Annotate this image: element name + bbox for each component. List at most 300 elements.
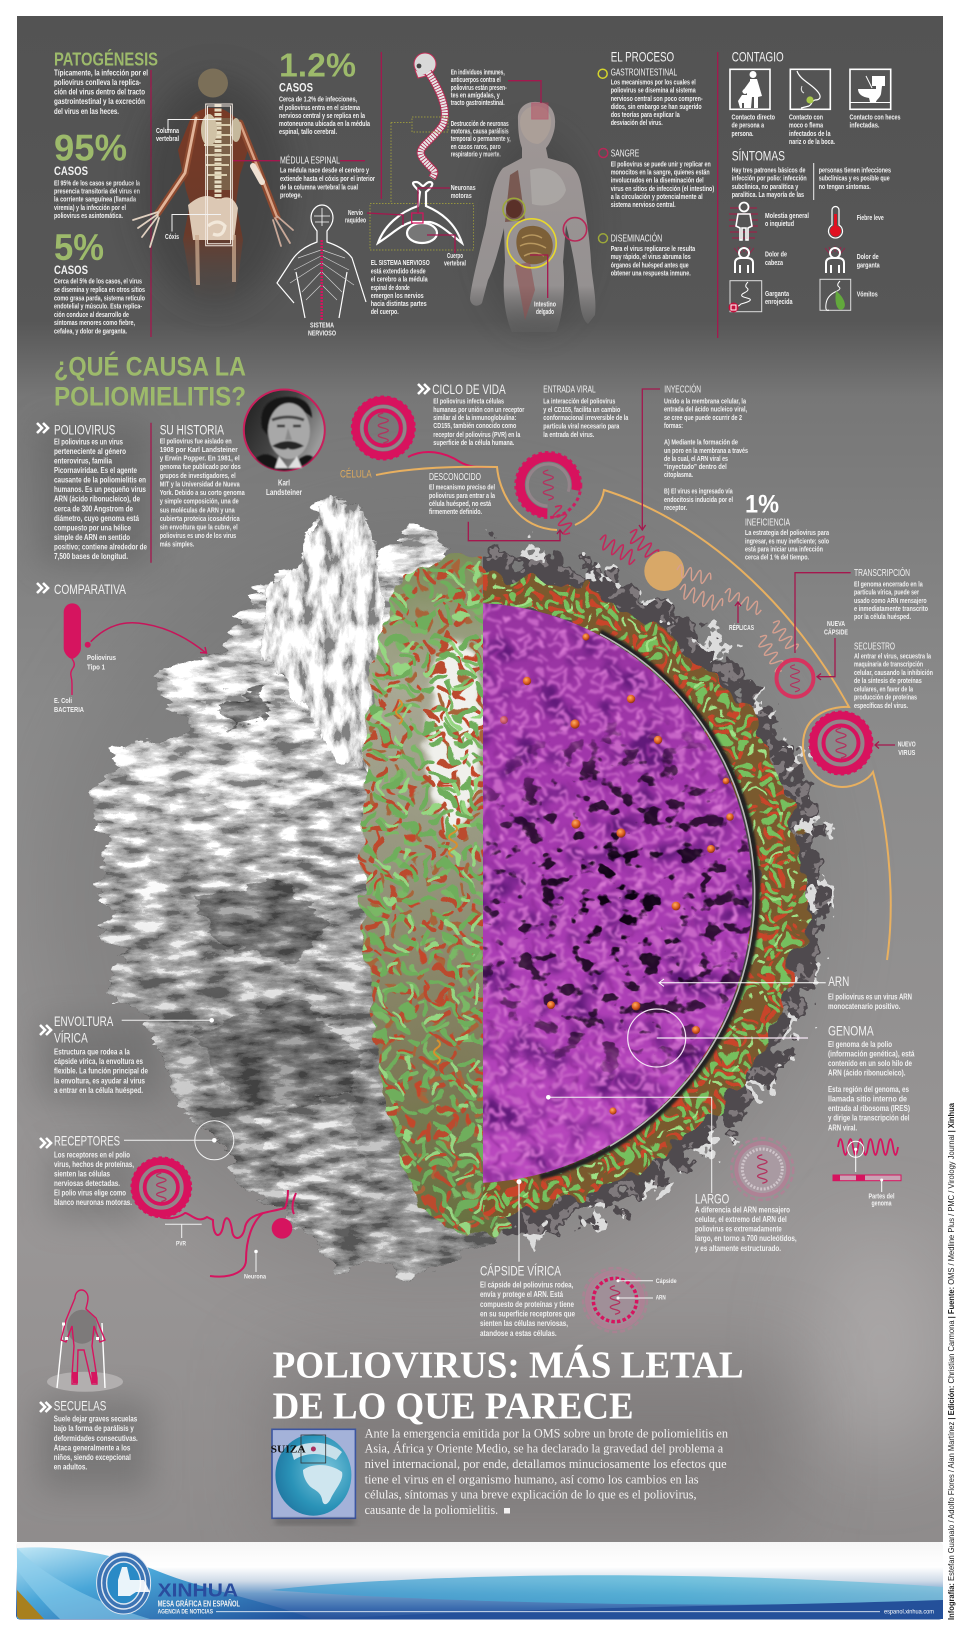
label: karl landsteiner: Landsteiner — [266, 488, 302, 497]
chevrons — [37, 583, 48, 593]
text: entrada viral: y el CD155, facilita un cambio — [543, 407, 620, 414]
text: largo: largo, en torno a 700 nucleótidos, — [695, 1234, 797, 1243]
text: su historia: y simple composición, una de — [160, 499, 239, 506]
text: su historia: 1908 por Karl Landsteiner — [160, 447, 238, 454]
text: entrada viral: La interacción del poliovirus — [543, 399, 615, 406]
label: neuronas motoras: motoras — [451, 193, 472, 200]
portrait: Karl Landsteiner — [244, 390, 325, 497]
logo text: XINHUA — [158, 1581, 238, 1601]
label: poliovirus tipo 1: Poliovirus — [87, 655, 116, 662]
arrow: desconocido — [468, 522, 563, 541]
text: inyección: un poro en la membrana a través — [664, 448, 748, 455]
text: secuestro: Al entrar el virus, secuestra la — [854, 654, 931, 661]
text: secuelas: bajo la forma de parálisis y — [54, 1424, 134, 1433]
spine and ribs — [205, 118, 232, 190]
text: ineficiencia: está para iniciar una infección — [745, 547, 823, 554]
text: secuestro: de la síntesis de proteínas — [854, 678, 922, 685]
text: secuestro: maquinaria de transcripción — [854, 662, 923, 669]
label: vómitos: Vómitos — [857, 292, 878, 299]
heading: envoltura vírica: VÍRICA — [54, 1029, 88, 1045]
text síntomas right: personas tienen infecciones — [819, 168, 891, 174]
icon: pale virus — [731, 1138, 793, 1200]
arms — [133, 118, 293, 247]
text: genoma: entrada al ribosoma (IRES) — [828, 1104, 910, 1113]
website: espanol.xinhua.com — [884, 1610, 934, 1616]
panel: envoltura vírica — [40, 1013, 214, 1095]
capsid ring, right side — [483, 570, 812, 1218]
text diseminación: obtener una respuesta inmune. — [611, 270, 691, 278]
label: dolor de cabeza — [765, 252, 787, 267]
label: contact 2: infectados de la — [789, 131, 831, 138]
text: entrada viral — [543, 399, 628, 439]
highlight circles — [503, 198, 587, 268]
text: introduction: causante de la poliomielitis. — [365, 1502, 498, 1517]
text 95% — [54, 180, 140, 220]
text: poliovirus: perteneciente al género — [54, 447, 126, 456]
text: su historia: grupos de investigadores, el — [160, 473, 236, 480]
text: genoma — [828, 1040, 915, 1132]
text: cápside: envía y protege el ARN. Está — [480, 1290, 563, 1299]
text: destrucción de neuronas: motoras, causa parálisis — [451, 128, 509, 136]
heading: secuelas: SECUELAS — [54, 1398, 106, 1414]
label: partes del genoma: Partes del — [868, 1193, 895, 1200]
heading: genoma: GENOMA — [828, 1022, 874, 1038]
label: karl landsteiner — [266, 478, 302, 497]
arrow: inyección — [639, 389, 660, 530]
text: envoltura: cápside vírica, la envoltura es — [54, 1057, 143, 1066]
icon: capsid diagram — [583, 1268, 647, 1332]
pointer: largo — [546, 1095, 712, 1193]
text síntomas left: infección por polio: infección — [732, 176, 807, 183]
title: POLIOVIRUS: MÁS LETAL — [273, 1345, 744, 1387]
text: el sistema nervioso: está extendido desde — [371, 268, 426, 276]
text: entrada viral: conformacional irreversible de la — [543, 415, 628, 422]
text: inyección: “inyectado” dentro del — [664, 464, 727, 471]
text: receptores: El polio virus elige como — [54, 1189, 126, 1198]
text: secuestro: celulares, en favor de la — [854, 686, 913, 693]
text: poliovirus: simple de ARN en sentido — [54, 533, 130, 542]
label: cápside: Cápside — [656, 1278, 677, 1285]
label: réplicas: RÉPLICAS — [729, 623, 754, 632]
text diseminación — [611, 246, 695, 278]
text: secuelas: deformidades consecutivas. — [54, 1434, 138, 1443]
label: garganta enrojecida — [765, 291, 793, 306]
label: intestino delgado: Intestino — [534, 302, 556, 309]
text gastrointestinal — [611, 80, 703, 127]
text: transcripción: El genoma encerrado en la — [854, 582, 923, 589]
text: su historia: y Erwin Popper. En 1981, el — [160, 456, 240, 462]
text: introduction: Ante la emergencia emitida por la OMS sobre un brote de poliomielitis en — [365, 1425, 728, 1440]
label: contact 3 — [850, 114, 901, 130]
panel: patogénesis — [54, 49, 158, 335]
pelvis — [188, 196, 238, 240]
text 1.2%: el poliovirus entra en el sistema — [279, 105, 360, 112]
text 5%: ción conduce al desarrollo de — [54, 312, 129, 319]
icon: vomit — [820, 279, 851, 310]
text: ciclo de vida — [433, 398, 525, 447]
text síntomas left — [732, 168, 807, 199]
chevrons — [37, 423, 48, 433]
heading: receptores: RECEPTORES — [54, 1133, 120, 1149]
text: desconocido: El mecanismo preciso del — [429, 485, 495, 492]
heading: cápside vírica: CÁPSIDE VÍRICA — [480, 1263, 561, 1279]
label: contact 1: de persona a — [732, 123, 764, 130]
casos label 5: CASOS — [54, 263, 88, 277]
intro text: Típicamente, la infección por el — [54, 68, 148, 78]
envelope highlights, upper peaks — [260, 500, 392, 780]
text: inyección: B) El virus es ingresado vía — [664, 489, 733, 496]
text: arn: El poliovirus es un virus ARN — [828, 992, 912, 1001]
squiggle: entering RNA — [550, 504, 575, 536]
label: intestino delgado: delgado — [536, 309, 554, 316]
label: contact 2 — [789, 114, 835, 146]
text: genoma: ARN (ácido ribonucleico). — [828, 1069, 906, 1078]
text: envoltura: flexible. La función principal de — [54, 1067, 148, 1076]
text: ciclo de vida: CD155, también conocido como — [433, 423, 516, 430]
text: genoma: llamada sitio interno de — [828, 1095, 907, 1104]
label: cuerpo vertebral — [444, 253, 466, 268]
callout: ARN — [659, 973, 912, 1011]
text: transcripción: usado como ARN mensajero — [854, 598, 927, 605]
text: receptores — [54, 1150, 134, 1207]
text 5%: endotelial y músculo. Esta replica- — [54, 304, 143, 311]
title — [273, 1345, 744, 1427]
text diseminación: muy rápido, el virus abruma los — [611, 254, 691, 261]
text: inyección: citoplasma. — [664, 472, 693, 479]
text: envoltura: la envoltura, es ayudar al virus — [54, 1076, 145, 1085]
heading: patogénesis: PATOGÉNESIS — [54, 49, 158, 70]
heading: poliovirus: POLIOVIRUS — [54, 421, 115, 437]
icon: attached virus — [352, 397, 414, 459]
text: secuelas: en adultos. — [54, 1463, 87, 1472]
logo text: MESA GRÁFICA EN ESPAÑOL — [158, 1600, 240, 1609]
text: ineficiencia: La estrategia del poliovirus para — [745, 530, 829, 537]
text: envoltura: Estructura que rodea a la — [54, 1048, 130, 1057]
heading: médula espinal: MÉDULA ESPINAL — [280, 154, 340, 166]
label: neurona — [244, 1250, 267, 1281]
text sangre — [611, 162, 714, 209]
marker: diseminación — [598, 234, 608, 243]
heading: contagio: CONTAGIO — [732, 49, 784, 65]
icon: thermometer — [828, 207, 843, 238]
text médula: La médula nace desde el cerebro y — [280, 168, 369, 175]
text: genoma: El genoma de la polio — [828, 1040, 892, 1049]
label: neuronas motoras — [451, 185, 476, 200]
casos label 1.2: CASOS — [279, 81, 313, 95]
heading: ineficiencia: INEFICIENCIA — [745, 517, 790, 528]
intro text: gastrointestinal y la excreción — [54, 97, 145, 106]
icon: poliovirus dot — [85, 642, 91, 648]
icon: headache — [734, 246, 754, 273]
label: dolor de cabeza: Dolor de — [765, 252, 787, 259]
text: cápside: atandose a estas células. — [480, 1329, 557, 1338]
capsid band: cut surface with rods — [361, 556, 510, 1234]
text: secuestro: celular, causando la inhibición — [854, 670, 933, 677]
text: largo: y es altamente estructurado. — [695, 1244, 781, 1253]
heading: arn: ARN — [828, 973, 849, 989]
text síntomas left: Hay tres patrones básicos de — [732, 168, 805, 174]
figure: human back anatomy — [133, 68, 365, 305]
text: inyección: Unido a la membrana celular, la — [664, 398, 746, 405]
label: nervio raquídeo — [345, 210, 366, 225]
stat: 1.2%: 1.2% — [279, 47, 356, 84]
arrow: comparison — [91, 623, 206, 653]
map: globe with Suiza — [271, 1429, 355, 1524]
label: cuerpo vertebral: vertebral — [444, 261, 466, 268]
chevrons — [40, 1402, 50, 1412]
text: inyección: de la cual, el ARN viral es — [664, 456, 728, 463]
text 1.2%: motoneurona ubicada en la médula — [279, 121, 370, 128]
text: envoltura: a entrar en la célula huésped. — [54, 1086, 143, 1095]
text: su historia: El poliovirus fue aislado en — [160, 438, 232, 445]
text diseminación: Para el virus replicarse le resulta — [611, 246, 695, 253]
intro text: ción del virus dentro del tracto — [54, 88, 145, 96]
icon: person contact — [730, 69, 770, 109]
text: ciclo de vida: humanas por unión con un receptor — [433, 407, 525, 414]
label: dolor de garganta: garganta — [857, 262, 880, 269]
icon: entering virus — [516, 452, 581, 518]
label: partes del genoma — [868, 1193, 895, 1208]
text: entrada viral: la entrada del virus. — [543, 432, 594, 439]
text: el sistema nervioso: hacia distintas partes — [371, 301, 427, 308]
text: individuos inmunes: En individuos inmunes, — [451, 70, 505, 76]
label: dolor de garganta: Dolor de — [857, 254, 879, 261]
text: largo: A diferencia del ARN mensajero — [695, 1205, 790, 1214]
label: contact 3: Contacto con heces — [850, 114, 901, 121]
text: genoma: contenido en un solo hilo de — [828, 1059, 912, 1068]
text: su historia: sin envoltura que la cubre, el — [160, 524, 238, 532]
illustration: poliovirus cross-section — [91, 500, 824, 1278]
icon: toilet — [850, 69, 891, 109]
text: destrucción de neuronas: Destrucción de neuronas — [451, 121, 509, 128]
text gastrointestinal: didos, sin embargo se han sugerido — [611, 104, 702, 111]
label: nuevo virus — [898, 742, 916, 757]
text: introduction — [365, 1425, 728, 1517]
text 95%: la corriente sanguínea (llamada — [54, 197, 136, 204]
label: columna vertebral: vertebral — [156, 136, 179, 143]
text: su historia: poliovirus es uno de los virus — [160, 533, 236, 540]
text: el sistema nervioso: el cerebro a la médula — [371, 276, 428, 284]
text gastrointestinal: nervioso central son poco compren- — [611, 96, 703, 103]
logo text: AGENCIA DE NOTICIAS — [158, 1610, 213, 1616]
text: su historia: cubierta proteica icosaédrica — [160, 516, 240, 523]
spine — [421, 72, 445, 178]
text: receptores: virus, hechos de proteínas, — [54, 1160, 134, 1169]
icon: virus on receptor — [132, 1158, 191, 1217]
text 1.2% — [279, 96, 370, 136]
callout: cápside vírica — [480, 1179, 677, 1338]
cell membrane line — [376, 467, 891, 960]
panel: secuelas — [40, 1290, 138, 1472]
text: arn: monocatenario positivo. — [828, 1002, 900, 1011]
pointers: capsid labels — [616, 1279, 653, 1300]
text: genoma: Esta región del genoma, es — [828, 1085, 909, 1094]
icon: new virus — [810, 712, 872, 774]
text 5%: síntomas menores como fiebre, — [54, 320, 135, 327]
text: poliovirus: humanos. Es un pequeño virus — [54, 485, 146, 494]
text: secuelas: Suele dejar graves secuelas — [54, 1415, 138, 1424]
arrow: nueva cápside — [817, 638, 835, 680]
pointer: genoma — [628, 1009, 808, 1067]
pointer: cápside — [516, 1179, 522, 1262]
subheading: diseminación: DISEMINACIÓN — [611, 232, 662, 245]
text 1.2%: nervioso central y se replica en la — [279, 113, 365, 120]
text: secuestro — [854, 654, 933, 710]
text: poliovirus: enterovirus, familia — [54, 456, 112, 465]
line: transcripción — [795, 573, 851, 653]
icon: e. coli bacteria — [64, 603, 81, 695]
RNA core: purple hemisphere — [483, 603, 752, 1183]
text: inyección: endocitosis inducida por el — [664, 497, 733, 504]
text: inyección: formas: — [664, 423, 683, 430]
logo: xinhua — [97, 1552, 151, 1614]
text síntomas left: paralítica. La mayoría de las — [732, 192, 804, 199]
label: fiebre: Fiebre leve — [857, 215, 884, 222]
label: poliovirus tipo 1: Tipo 1 — [87, 665, 105, 672]
icon: nose and mouth — [790, 69, 830, 109]
text: desconocido: célula huésped, no está — [429, 501, 491, 508]
text médula: de la columna vertebral la cual — [280, 184, 358, 192]
heading: comparativa: COMPARATIVA — [54, 581, 126, 597]
footer banner — [16, 1542, 943, 1620]
text: poliovirus: compuesto por una hélice — [54, 523, 131, 532]
text: su historia: sus moléculas de ARN y una — [160, 507, 235, 514]
text sangre: involucrados en la diseminación del — [611, 178, 704, 184]
text: desconocido: poliovirus para entrar a la — [429, 493, 495, 500]
text: receptores: Los receptores en el polio — [54, 1150, 130, 1159]
label: PVR: PVR — [176, 1242, 187, 1248]
marker: gastrointestinal — [598, 69, 607, 78]
panel: 1.2% casos — [279, 47, 375, 200]
text: individuos inmunes: poliovirus están presen- — [451, 85, 507, 92]
text 1.2%: Cerca de 1.2% de infecciones, — [279, 96, 357, 104]
panel: contagio — [730, 49, 901, 146]
label: columna vertebral — [156, 128, 179, 143]
text: el sistema nervioso: del cuerpo. — [371, 309, 399, 316]
diagram: ciclo de vida — [340, 381, 933, 960]
text: poliovirus: El poliovirus es un virus — [54, 437, 123, 446]
text: el sistema nervioso: espinal de donde — [371, 285, 410, 292]
text: ciclo de vida: superficie de la célula humana. — [433, 440, 514, 447]
neuron — [160, 1190, 296, 1277]
text: su historia: genoma fue publicado por dos — [160, 464, 241, 471]
text médula: protege. — [280, 192, 302, 200]
subheading: gastrointestinal: GASTROINTESTINAL — [611, 67, 677, 78]
text: inyección: entrada del ácido nucleico viral, — [664, 407, 747, 414]
heading: envoltura vírica: ENVOLTURA — [54, 1013, 114, 1029]
text: poliovirus: diámetro, cuyo genoma está — [54, 514, 139, 523]
chevrons — [40, 1138, 51, 1148]
label: molestia: Molestia general — [765, 213, 809, 220]
text: secuelas — [54, 1415, 138, 1472]
label: nervio raquídeo: Nervio — [348, 210, 363, 217]
text: genoma: ARN viral. — [828, 1123, 857, 1132]
text: transcripción: por la célula huésped. — [854, 614, 911, 621]
text: secuestro: específicas del virus. — [854, 703, 908, 710]
text síntomas right: no tengan síntomas. — [819, 184, 871, 191]
label: dolor de cabeza: cabeza — [765, 260, 783, 267]
label: columna vertebral: Columna — [156, 128, 179, 135]
text: cápside: sienten las células nerviosas, — [480, 1319, 568, 1328]
text: cápside: El cápside del poliovirus rodea, — [480, 1281, 573, 1290]
virus envelope: grey rocky left half — [91, 500, 500, 1278]
label: neuronas motoras: Neuronas — [451, 185, 476, 192]
text gastrointestinal: dos teorías para explicar la — [611, 112, 680, 119]
text 5%: como grasa parda, sistema retículo — [54, 295, 145, 302]
panel: síntomas — [728, 148, 891, 312]
label: sistema nervioso: SISTEMA — [310, 322, 334, 330]
label: contact 3: infectadas. — [850, 123, 880, 130]
label: nueva cápside — [824, 621, 848, 636]
text: introduction: nivel internacional, por ende, detallamos minuciosamente los efectos que — [365, 1456, 727, 1471]
label: contact 1: Contacto directo — [732, 114, 775, 121]
chevrons — [418, 384, 429, 394]
heading: el proceso: EL PROCESO — [611, 49, 674, 65]
heading: qué causa la poliomielitis: POLIOMIELITIS? — [54, 382, 246, 412]
stat: 5%: 5% — [54, 227, 104, 268]
figure: skeleton spine and vertebra — [345, 53, 511, 316]
map: globe with Suiza: SUIZA — [271, 1444, 306, 1456]
panel: receptores — [40, 1121, 296, 1281]
intro text — [54, 68, 148, 116]
text: ciclo de vida: similar al de la inmunoglobulina: — [433, 415, 516, 422]
heading: inyección: INYECCIÓN — [664, 382, 701, 395]
text: genoma: (información genética), está — [828, 1050, 915, 1059]
text: poliovirus: causante de la poliomielitis en — [54, 476, 146, 485]
title: DE LO QUE PARECE — [273, 1385, 634, 1427]
text: poliovirus: cerca de 300 Angstrom de — [54, 504, 133, 513]
text 5%: cefalea, y dolor de garganta. — [54, 328, 127, 335]
vertebra — [378, 182, 462, 243]
label: nuevo virus: NUEVO — [898, 742, 916, 749]
text: largo: celular, el extremo del ARN del — [695, 1215, 787, 1224]
icon: child with crutches — [47, 1290, 123, 1392]
text: entrada viral: partícula viral necesario para — [543, 424, 619, 430]
text: individuos inmunes — [451, 70, 507, 107]
text: transcripción — [854, 582, 928, 621]
text: individuos inmunes: tes en amígdalas, y — [451, 92, 500, 100]
heading: transcripción: TRANSCRIPCIÓN — [854, 566, 910, 579]
text: destrucción de neuronas: temporal o permanente y, — [451, 136, 511, 143]
panel: su historia — [160, 421, 245, 549]
text: largo — [695, 1205, 797, 1253]
text gastrointestinal: poliovirus se disemina al sistema — [611, 88, 696, 95]
text 95%: El 95% de los casos se produce la — [54, 180, 140, 187]
heading: qué causa la poliomielitis — [54, 352, 246, 412]
text: el sistema nervioso: emergen los nervios — [371, 293, 424, 300]
text: inyección: se cree que puede ocurrir de 2 — [664, 415, 742, 422]
text: su historia: York. Debido a su corto genoma — [160, 490, 245, 497]
label: contact 2: Contacto con — [789, 114, 823, 121]
label: nuevo virus: VIRUS — [898, 750, 916, 757]
virus outer spikes, right side — [483, 530, 840, 1252]
text sangre: sistema nervioso central. — [611, 202, 676, 209]
skull — [414, 53, 436, 78]
diagram: genome parts — [833, 1139, 901, 1208]
heading: entrada viral: ENTRADA VIRAL — [543, 384, 596, 395]
label: célula: CÉLULA — [340, 467, 372, 480]
arrow: nuevo virus — [875, 742, 895, 748]
label: nervio raquídeo: raquídeo — [345, 218, 366, 225]
label: coxis: Cóxis — [165, 234, 179, 241]
gold corner — [17, 1590, 44, 1619]
label: contact 1 — [732, 114, 775, 138]
text 95%: presencia transitoria del virus en — [54, 188, 140, 196]
intro text: poliovirus conlleva la replica- — [54, 78, 141, 87]
text: inyección: A) Mediante la formación de — [664, 440, 738, 447]
callout: largo — [546, 1095, 797, 1253]
neuron nucleus — [272, 1218, 292, 1239]
